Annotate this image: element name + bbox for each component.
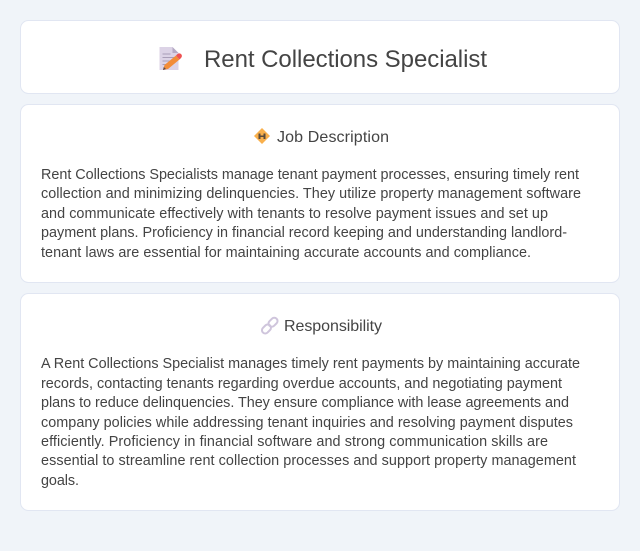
panel: responsibility (20, 294, 620, 510)
heading: job description: Job Description (277, 129, 389, 146)
text block: job description: and communicate effectively with tenants to resolve payment issues and set up (41, 206, 548, 222)
text block: job description (41, 167, 581, 261)
text block: responsibility (41, 356, 580, 489)
text block: responsibility: company policies while addressing tenant inquiries and resolving payment disputes (41, 415, 573, 431)
text block: responsibility: records, contacting tenants regarding overdue accounts, and negotiating payment (41, 376, 562, 392)
title: Rent Collections Specialist (204, 46, 487, 73)
text block: responsibility: essential to streamline rent collection processes and support property management (41, 453, 576, 469)
text block: responsibility: A Rent Collections Specialist manages timely rent payments by maintaining accurate (41, 356, 580, 372)
text block: job description: Rent Collections Specialists manage tenant payment processes, ensuring timely rent (41, 167, 579, 183)
panel: title card (20, 20, 620, 94)
text block: responsibility: goals. (41, 473, 79, 489)
text block: job description: payment plans. Proficiency in financial record keeping and understanding landlord- (41, 225, 567, 241)
text block: job description: tenant laws are essential for maintaining accurate accounts and compliance. (41, 245, 531, 261)
text block: job description: collection and minimizing delinquencies. They utilize property management software (41, 186, 581, 202)
panel: job description (20, 104, 620, 282)
heading: responsibility: Responsibility (284, 318, 382, 335)
icon: diamond sign (254, 128, 270, 144)
text block: responsibility: plans to reduce delinquencies. They ensure compliance with lease agreements and (41, 395, 569, 411)
icon: chain link (261, 316, 279, 335)
icon: document with pencil (160, 47, 182, 70)
text block: responsibility: efficiently. Proficiency in financial software and strong communication skills are (41, 434, 548, 450)
